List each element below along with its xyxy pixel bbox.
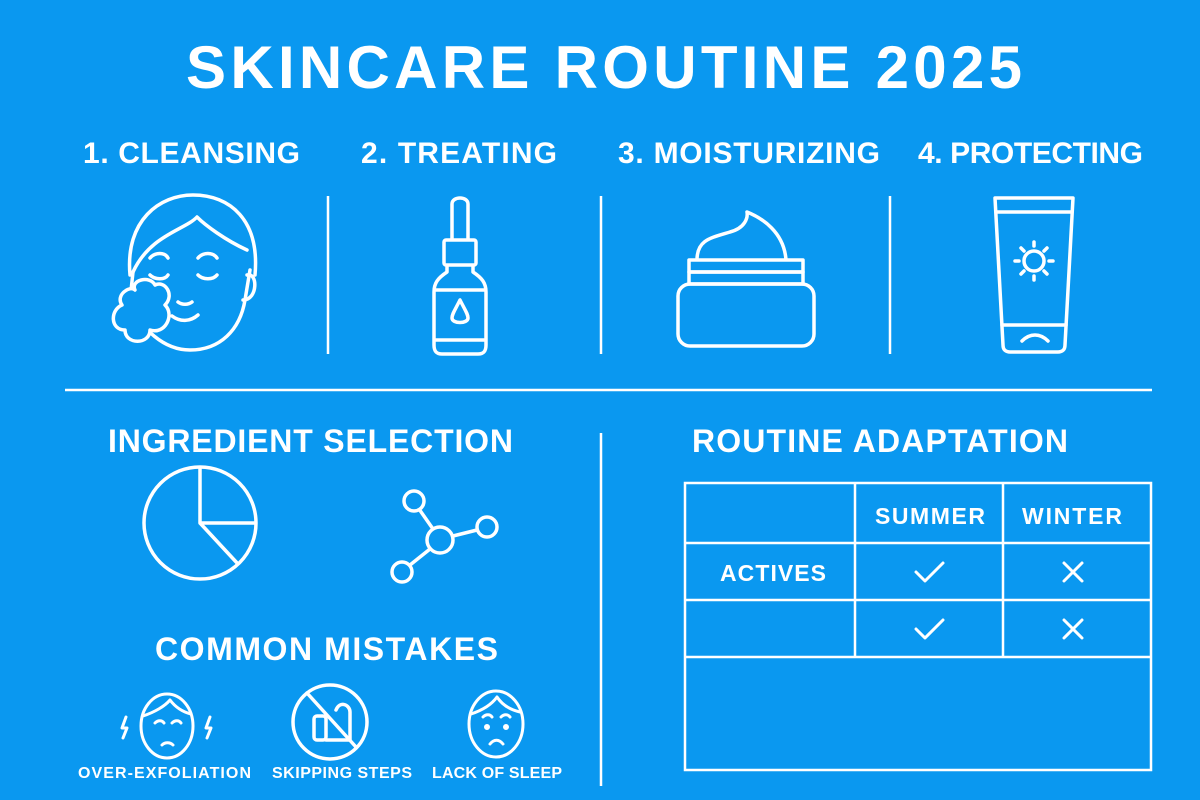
table: routine adaptation: ACTIVES [720,560,826,586]
icon: cream jar [678,212,814,346]
icon: pie chart [144,467,256,579]
table: routine adaptation: WINTER [1022,503,1122,529]
icon: sunscreen tube [995,198,1073,352]
table: routine adaptation: SUMMER [875,503,985,529]
mistake labels: LACK OF SLEEP [432,765,562,782]
step headings: 2. TREATING [361,137,557,170]
mistake labels: OVER-EXFOLIATION [78,765,251,782]
icon: lack of sleep face [469,691,523,757]
mistake labels: SKIPPING STEPS [272,765,412,782]
icon: face cleansing [113,195,256,350]
heading: common mistakes: COMMON MISTAKES [155,631,498,667]
table: routine adaptation [685,483,1151,770]
icon: skipping steps [293,685,367,759]
icon: serum bottle [434,198,486,354]
heading: routine adaptation: ROUTINE ADAPTATION [692,423,1068,459]
title: SKINCARE ROUTINE 2025 [186,34,1022,101]
icon: over-exfoliation face [122,694,211,758]
step headings: 3. MOISTURIZING [618,137,880,170]
heading: ingredient selection: INGREDIENT SELECTION [108,423,513,459]
mistake labels [78,765,562,782]
step headings: 4. PROTECTING [918,137,1143,170]
icon: molecule [392,491,497,582]
step headings [83,137,1143,170]
step headings: 1. CLEANSING [83,137,300,170]
